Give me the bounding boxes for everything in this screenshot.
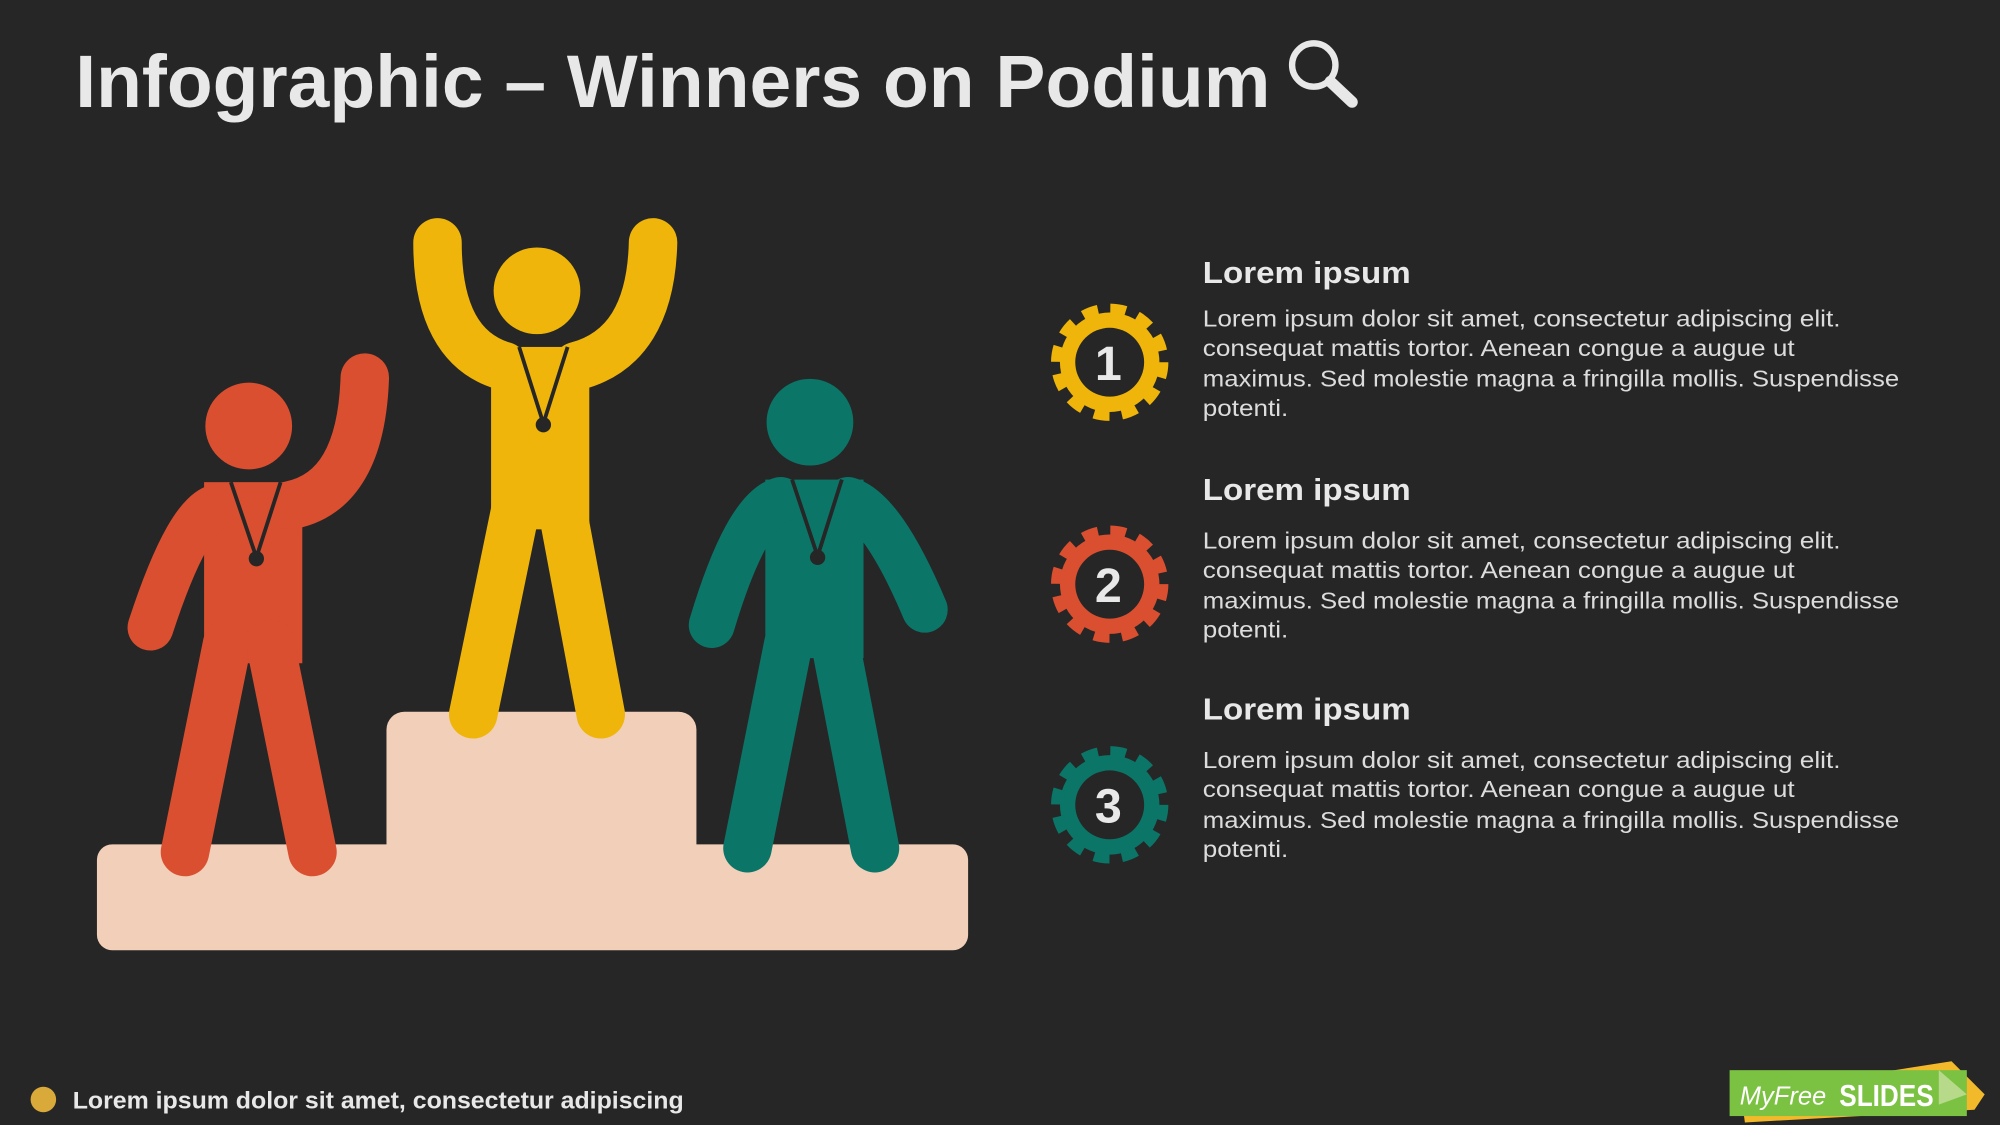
item 2: maximus. Sed molestie magna a fringilla mollis. Suspendisse — [1203, 587, 1899, 613]
item 3 — [1057, 692, 1899, 862]
icon: magnifier — [1292, 43, 1352, 102]
item 1: Lorem ipsum — [1203, 256, 1411, 290]
icon: gear 1: 1 — [1095, 337, 1122, 391]
footer note: Lorem ipsum dolor sit amet, consectetur adipiscing — [73, 1087, 684, 1114]
icon: gear 2 — [1057, 532, 1162, 636]
item 3: Lorem ipsum dolor sit amet, consectetur adipiscing elit. — [1203, 747, 1841, 773]
icon: gear 1 — [1057, 310, 1162, 415]
item 3: maximus. Sed molestie magna a fringilla mollis. Suspendisse — [1203, 807, 1899, 833]
logo: SLIDES — [1839, 1079, 1934, 1113]
icon: gear 2: 2 — [1095, 559, 1122, 613]
item 2: potenti. — [1203, 617, 1288, 643]
figure: yellow winner — [438, 242, 653, 714]
item 2: Lorem ipsum — [1203, 473, 1411, 507]
item 1 — [1057, 256, 1899, 421]
item 3: potenti. — [1203, 836, 1288, 862]
item 1: potenti. — [1203, 395, 1288, 421]
item 2 — [1057, 473, 1899, 643]
logo: MyFree — [1740, 1083, 1826, 1111]
figure: teal third — [712, 379, 925, 848]
icon: gear 3 — [1057, 753, 1162, 857]
item 2: consequat mattis tortor. Aenean congue a augue ut — [1203, 557, 1795, 583]
logo — [1730, 1061, 1985, 1122]
item 1: consequat mattis tortor. Aenean congue a augue ut — [1203, 335, 1795, 361]
icon: gear 3: 3 — [1095, 780, 1122, 834]
item 3: consequat mattis tortor. Aenean congue a augue ut — [1203, 776, 1795, 802]
item 2: Lorem ipsum dolor sit amet, consectetur adipiscing elit. — [1203, 527, 1841, 553]
item 1: Lorem ipsum dolor sit amet, consectetur adipiscing elit. — [1203, 306, 1841, 332]
figure: red second — [151, 378, 365, 852]
item 3: Lorem ipsum — [1203, 692, 1411, 726]
podium — [97, 712, 968, 950]
title: Infographic – Winners on Podium — [75, 40, 1270, 123]
item 1: maximus. Sed molestie magna a fringilla mollis. Suspendisse — [1203, 365, 1899, 391]
